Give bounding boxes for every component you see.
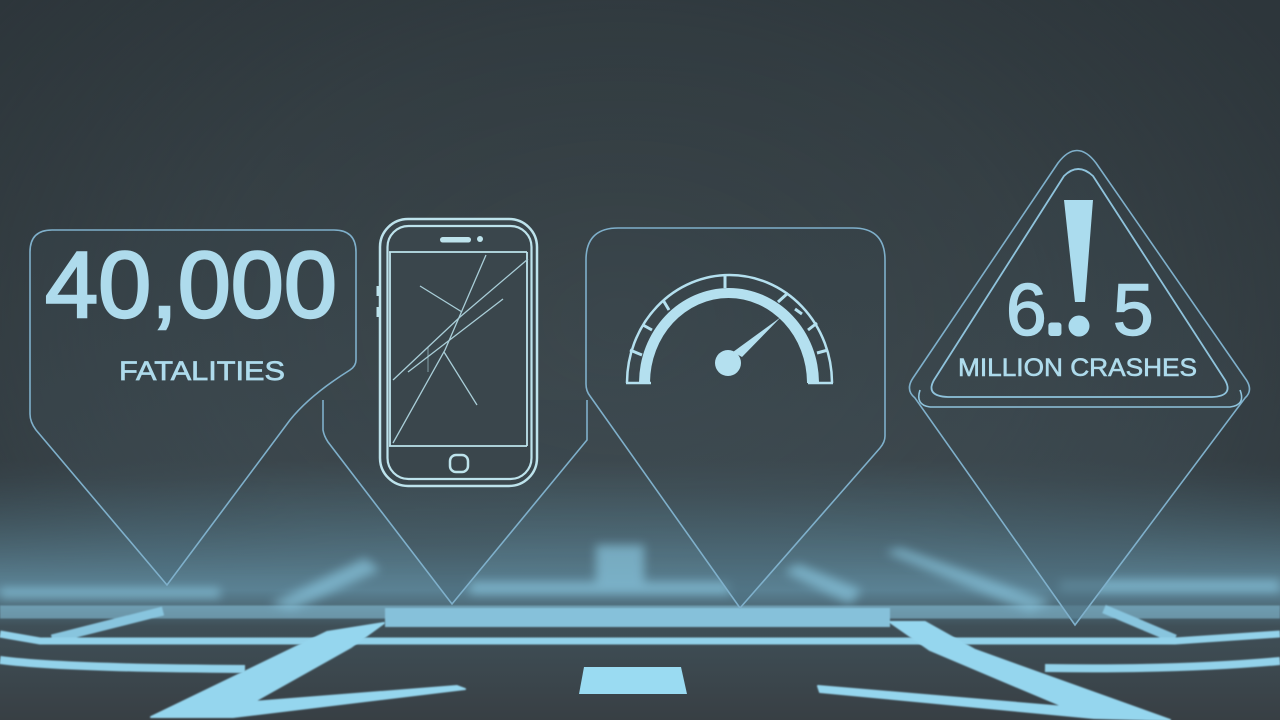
- label: FATALITIES: [119, 356, 285, 386]
- central road band: [385, 608, 890, 627]
- icon: speedometer: [626, 275, 833, 383]
- exclamation mark: [1064, 200, 1093, 336]
- warning triangle outlines: [919, 169, 1242, 407]
- middle road lines: [0, 609, 1280, 669]
- left arrow marking: [151, 623, 465, 717]
- big number: 40,000: [45, 232, 337, 337]
- panel: crashes pin: 5: [1113, 270, 1154, 351]
- panel: speed pin: [586, 228, 885, 608]
- panel: crashes pin: .: [1048, 288, 1062, 344]
- figure: 6: [1006, 270, 1047, 351]
- panel: phone pin: [323, 400, 587, 604]
- road network: [0, 545, 1280, 720]
- right arrow marking: [818, 622, 1170, 720]
- background: [0, 219, 1280, 700]
- icon: cracked phone: [376, 219, 537, 486]
- center dash: [579, 667, 687, 694]
- distant road lines: [0, 545, 1280, 612]
- screen cracks: [393, 255, 528, 443]
- panel: crashes pin: [909, 150, 1250, 625]
- label: MILLION CRASHES: [958, 354, 1197, 382]
- panel: fatalities pin: [30, 230, 356, 585]
